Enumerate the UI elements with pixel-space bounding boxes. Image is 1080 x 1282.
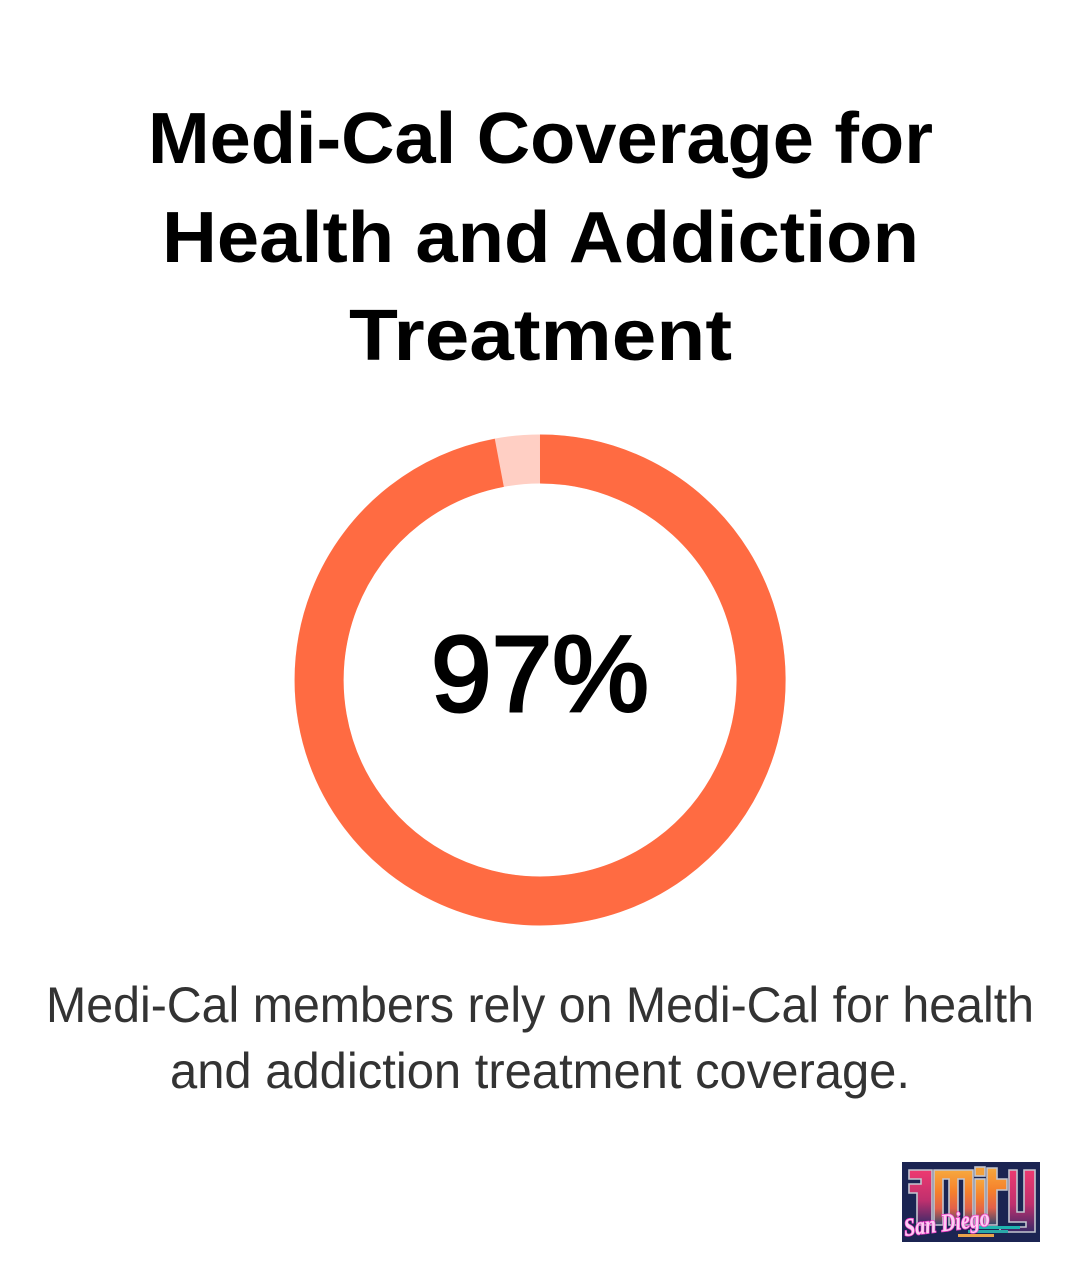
logo script: San Diego: San Diego [902, 1205, 991, 1242]
donut value: 97% [431, 613, 649, 734]
description text: Medi-Cal members rely on Medi-Cal for health [46, 977, 1034, 1033]
description text [46, 977, 1034, 1099]
donut chart: 97% [319, 459, 761, 901]
title: Medi-Cal Coverage for [148, 99, 933, 179]
ring value: 97% [319, 459, 761, 901]
logo beach stripes [958, 1226, 1020, 1237]
title [148, 99, 933, 376]
description text: and addiction treatment coverage. [170, 1043, 910, 1099]
logo letters [909, 1167, 1035, 1232]
logo: Amity San Diego [902, 1162, 1040, 1242]
title: Health and Addiction [162, 198, 919, 278]
ring track: remaining 3% [319, 459, 761, 901]
title: Treatment [349, 296, 732, 376]
